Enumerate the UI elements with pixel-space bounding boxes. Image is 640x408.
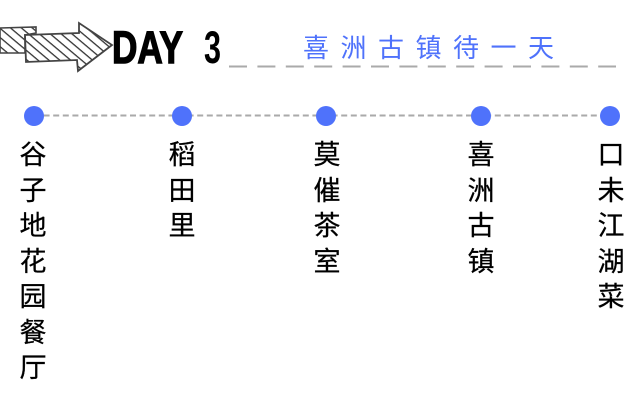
stop: 谷子地花园餐厅	[20, 140, 46, 383]
stop: 谷子地花园餐厅: 地	[20, 211, 46, 241]
stop: 喜洲古镇	[468, 140, 494, 276]
stop: 稻田里: 田	[168, 176, 196, 206]
stop: 谷子地花园餐厅: 厅	[20, 353, 46, 383]
stop: 莫催茶室: 催	[314, 176, 340, 206]
stop: 莫催茶室: 莫	[314, 140, 340, 170]
stop: 谷子地花园餐厅: 园	[20, 282, 46, 312]
stop: 谷子地花园餐厅: 餐	[20, 318, 46, 348]
stop: 口未江湖菜	[598, 140, 624, 312]
stop: 喜洲古镇: 喜	[468, 140, 494, 170]
stop: 口未江湖菜: 未	[598, 176, 624, 206]
stop: 口未江湖菜: 湖	[598, 246, 624, 276]
stop: 谷子地花园餐厅: 子	[20, 176, 46, 206]
stop: 谷子地花园餐厅: 花	[20, 246, 46, 276]
subtitle: 喜洲古镇待一天	[303, 33, 566, 63]
stop: 喜洲古镇: 镇	[468, 246, 494, 276]
stop: 稻田里	[168, 140, 196, 241]
stop: 喜洲古镇: 洲	[468, 176, 494, 206]
stop: 莫催茶室: 茶	[314, 211, 340, 241]
stop: 稻田里: 稻	[168, 140, 196, 170]
stop: 口未江湖菜: 江	[598, 211, 624, 241]
stop: 稻田里: 里	[168, 211, 196, 241]
stop: 喜洲古镇: 古	[468, 211, 494, 241]
stop: 口未江湖菜: 口	[598, 140, 624, 170]
stop: 口未江湖菜: 菜	[598, 282, 624, 312]
stop: 莫催茶室	[314, 140, 340, 276]
stop: 莫催茶室: 室	[314, 246, 340, 276]
icon: sketched double arrow	[0, 21, 114, 73]
stop: 谷子地花园餐厅: 谷	[20, 140, 46, 170]
